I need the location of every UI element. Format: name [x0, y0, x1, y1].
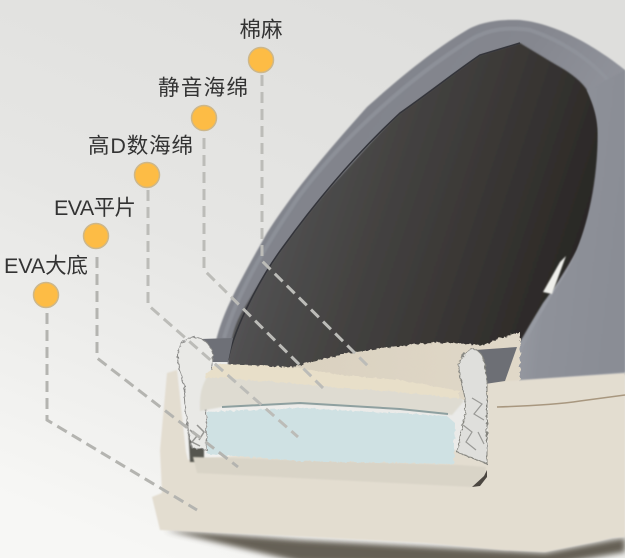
gap shadow — [222, 403, 448, 414]
callout: 高D数海绵 — [88, 134, 193, 188]
callout: 棉麻 — [239, 18, 283, 72]
marker — [248, 48, 274, 72]
foam roll — [457, 349, 487, 464]
slipper inner lining — [228, 43, 598, 380]
EVA outer sole — [152, 370, 625, 552]
right lining roll — [457, 347, 517, 464]
marker — [192, 106, 216, 130]
sole shadow — [165, 530, 625, 558]
EVA flat plate — [193, 457, 486, 487]
left lining roll — [178, 337, 233, 450]
cotton linen fuzzy layer — [205, 364, 460, 398]
leader line: 棉麻 — [262, 75, 368, 366]
leader line: 高D数海绵 — [148, 190, 298, 437]
slipper upper outer shell — [215, 20, 625, 385]
marker — [134, 162, 160, 188]
marker — [34, 282, 58, 308]
callout: EVA大底 — [4, 254, 88, 308]
label: EVA平片 — [54, 196, 136, 220]
illustration: slipper cross-section — [152, 20, 625, 558]
leader line: 静音海绵 — [204, 138, 323, 388]
leader line: EVA大底 — [47, 313, 197, 510]
label: 高D数海绵 — [88, 134, 193, 158]
marker — [84, 224, 108, 248]
foam roll — [178, 337, 213, 450]
label: EVA大底 — [4, 254, 88, 278]
callout: EVA平片 — [54, 196, 136, 248]
upper right side panel — [507, 70, 625, 381]
label: 棉麻 — [239, 18, 283, 42]
gray piece — [475, 347, 517, 384]
cavity shadow — [186, 385, 204, 462]
gray piece — [200, 338, 233, 362]
crumpled edge — [190, 425, 204, 446]
lining seam — [228, 43, 520, 360]
label: 静音海绵 — [158, 76, 248, 100]
callout: 静音海绵 — [158, 76, 248, 130]
leader line: EVA平片 — [97, 257, 238, 467]
cavity corner shadow — [472, 470, 487, 487]
glimpse of white inside slipper — [543, 256, 566, 294]
silent foam layer — [200, 365, 464, 415]
high density blue foam — [207, 408, 455, 464]
fur insole — [225, 332, 520, 400]
sole seam stain — [497, 395, 625, 407]
crumpled folds — [463, 398, 484, 450]
upper highlight rim — [224, 29, 612, 338]
